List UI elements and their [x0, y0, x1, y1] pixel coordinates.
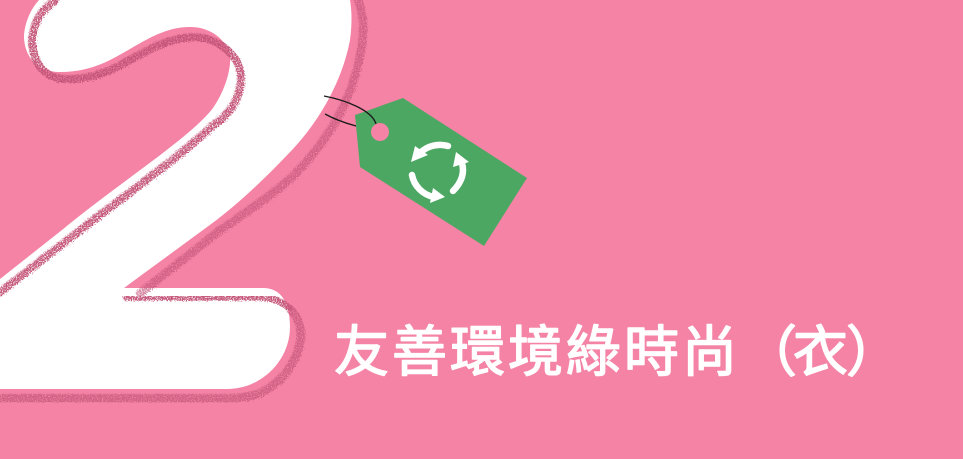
recycling arrow bottom [412, 175, 445, 203]
tag string, upper strand [324, 96, 376, 124]
tag body [355, 98, 527, 246]
recycling arrow right [453, 152, 469, 191]
numeral 2 crayon outline, inner curve [0, 0, 241, 292]
numeral 2 crayon outline, base top [126, 297, 290, 309]
title: 友善環境綠時尚（衣） [334, 321, 901, 383]
price tag [324, 96, 527, 246]
recycling arrow top [411, 145, 448, 162]
numeral 2 crayon outline, outer curve [140, 0, 363, 293]
numeral 2 white body [0, 0, 352, 389]
icon: recycling arrows [411, 145, 469, 203]
tag string, lower strand [325, 114, 356, 126]
numeral 2 crayon outline, base end and bottom [0, 309, 301, 398]
numeral 2 [0, 0, 363, 398]
